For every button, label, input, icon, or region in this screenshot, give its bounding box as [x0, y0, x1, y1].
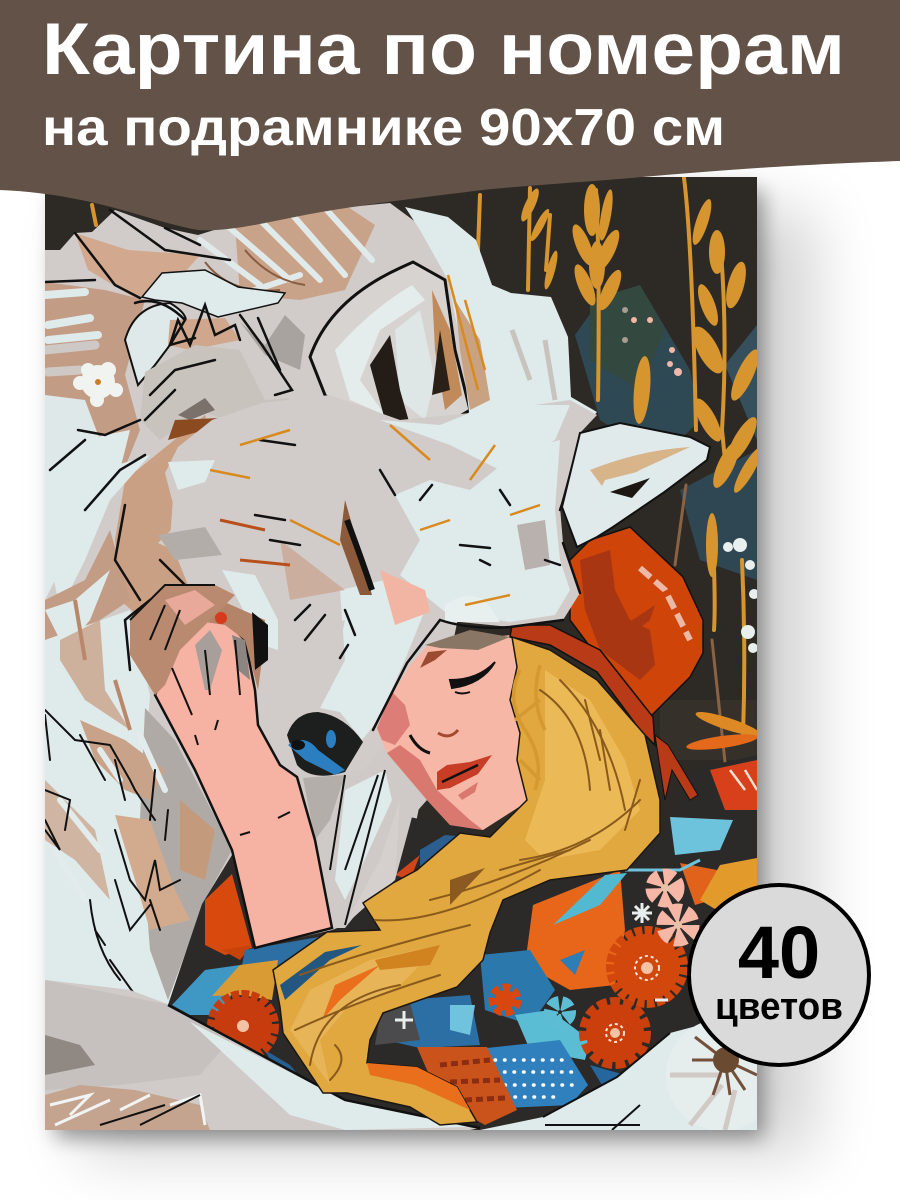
face: nose — [438, 730, 458, 736]
fur: tan mid strip — [115, 415, 206, 612]
wheat stalks — [92, 178, 766, 790]
fur: left stripes — [45, 282, 145, 480]
head: white zones — [395, 440, 570, 622]
subtitle: на подрамнике 90х70 см — [42, 99, 725, 157]
fur: lower left white and tan — [45, 610, 186, 1004]
face: closed eyes — [450, 662, 495, 688]
fur: tan gap and gray lump — [168, 318, 240, 350]
banner — [0, 0, 900, 230]
badge number: 40 — [738, 911, 820, 994]
hand: fingers and paw — [190, 600, 265, 690]
fur: tan tuft — [75, 233, 200, 300]
hat: band and ties — [510, 625, 655, 745]
face: lips — [437, 755, 492, 790]
painting background — [45, 177, 757, 1130]
white berries — [723, 538, 759, 653]
wolf nose — [287, 712, 363, 776]
colour-count badge — [689, 885, 869, 1065]
white daisy — [670, 1023, 757, 1130]
title: Картина по номерам — [42, 9, 845, 90]
raised hand and arm — [130, 585, 332, 948]
fur: white feathers — [45, 430, 130, 600]
hair: braids over temple — [514, 665, 545, 790]
badge label: цветов — [715, 986, 843, 1028]
wolf body fur — [45, 203, 470, 1005]
face: nose tip and cheek shading — [377, 692, 410, 745]
wolf fur tuft above head — [405, 207, 597, 414]
robe: cyan flower — [551, 1003, 569, 1021]
robe: large orange flowers — [214, 934, 680, 1062]
white arm and sheet — [45, 980, 757, 1130]
robe: pink flowers — [654, 877, 690, 937]
robe: small snow flowers — [395, 903, 668, 1029]
wolf ear: right — [562, 423, 710, 547]
wolf ear: top — [310, 262, 470, 440]
background teal shapes — [575, 285, 757, 760]
canvas drop shadow — [55, 190, 815, 1155]
robe: patches — [205, 874, 252, 955]
wolf head — [158, 395, 597, 742]
hair: strands — [295, 680, 640, 1080]
fur: white curl — [125, 303, 186, 385]
hair: dark blue gap — [280, 945, 362, 1000]
head: closed eye — [347, 520, 372, 590]
patterned robe — [168, 755, 757, 1128]
fur: top right stripes — [235, 205, 375, 300]
girl face — [377, 630, 530, 830]
head: snout tip — [445, 596, 500, 622]
fur: small white flower on mane — [73, 362, 123, 407]
fur: white blob — [142, 270, 285, 317]
gray drapery under snout — [303, 770, 427, 928]
fur: ink lines upper — [45, 210, 292, 670]
head: ink strokes — [255, 440, 585, 730]
painting: wolf and sleeping girl — [45, 177, 778, 1131]
hat — [510, 527, 703, 800]
hair — [273, 637, 660, 1125]
